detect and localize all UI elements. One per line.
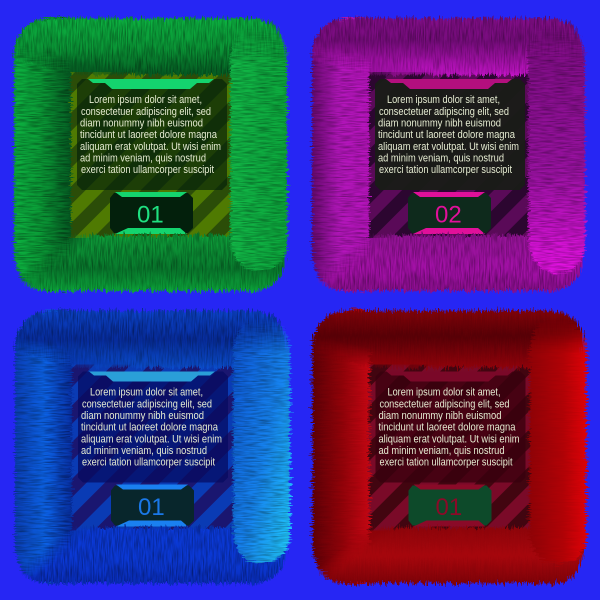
body text: exerci tation ullamcorper suscipit [81,164,214,176]
body text: ad minim veniam, quis nostrud [81,445,207,457]
text card [376,372,526,482]
body text: Lorem ipsum dolor sit amet, [89,94,202,106]
fur: left bar [312,18,369,290]
frame underlay [322,320,574,572]
body text: exerci tation ullamcorper suscipit [82,456,215,468]
fur: bottom bar [19,528,286,584]
body text: diam nonummy nibh euismod [80,118,203,130]
fur: top bar [312,310,582,368]
fur: left bar [15,310,72,582]
frame underlay [25,320,277,572]
badge accents [414,484,486,526]
fur: top bar [14,18,284,75]
text card [77,79,227,190]
body text: consectetuer adipiscing elit, sed [380,398,510,410]
body text: exerci tation ullamcorper suscipit [380,456,512,468]
body text: tincidunt ut laoreet dolore magna [80,129,218,141]
body text: diam nonummy nibh euismod [378,410,502,422]
body text [378,386,520,468]
fur: right bar [528,25,585,274]
body text [80,94,221,176]
number: 01 [138,494,165,521]
body text: diam nonummy nibh euismod [81,410,204,422]
text card [375,79,525,190]
panel: red fur frame 01 [312,310,586,584]
fur: right bar [230,25,287,271]
body text: tincidunt ut laoreet dolore magna [378,422,516,434]
body text: consectetuer adipiscing elit, sed [379,106,509,118]
body text: consectetuer adipiscing elit, sed [82,398,212,410]
striped backing [68,72,233,238]
fur: left bar [312,310,370,582]
body text [81,386,222,468]
number badge [408,486,492,526]
number: 01 [137,202,164,228]
body text: ad minim veniam, quis nostrud [378,445,504,457]
body text: aliquam erat volutpat. Ut wisi enim [378,434,520,446]
top accent [386,79,512,89]
badge accents [115,192,187,234]
body text: aliquam erat volutpat. Ut wisi enim [81,434,222,446]
frame underlay [322,28,574,280]
top accent [386,372,512,382]
fur: top bar [312,18,582,75]
body text: aliquam erat volutpat. Ut wisi enim [378,141,519,153]
number badge [408,193,491,233]
body text: tincidunt ut laoreet dolore magna [81,422,219,434]
striped backing [366,72,531,238]
fur: bottom bar [316,528,584,584]
badge accents [413,192,485,234]
fur: bottom bar [316,235,583,291]
body text: ad minim veniam, quis nostrud [80,152,206,164]
text card [78,372,228,482]
panel: blue fur frame 01 [15,310,290,584]
number: 02 [435,202,462,228]
top accent [88,79,214,89]
body text: ad minim veniam, quis nostrud [378,152,504,164]
fur: bottom bar [18,235,285,291]
striped backing [366,364,532,530]
body text: aliquam erat volutpat. Ut wisi enim [80,141,221,153]
panel: purple fur frame 02 [312,18,585,291]
fur: left bar [14,18,71,290]
top accent [89,372,215,382]
number badge [111,486,194,526]
frame underlay [24,28,276,280]
body text: consectetuer adipiscing elit, sed [81,106,211,118]
body text: Lorem ipsum dolor sit amet, [388,386,500,398]
panel: green fur frame 01 [14,18,287,291]
fur: top bar [15,310,285,368]
number: 01 [436,494,462,521]
body text: Lorem ipsum dolor sit amet, [387,94,500,106]
fur: right bar [530,318,586,564]
number badge [110,193,193,233]
badge accents [116,484,188,526]
fur: right bar [233,318,290,564]
body text: diam nonummy nibh euismod [378,118,501,130]
striped backing [69,364,234,530]
body text: exerci tation ullamcorper suscipit [379,164,512,176]
body text: Lorem ipsum dolor sit amet, [90,386,203,398]
body text [378,94,519,176]
body text: tincidunt ut laoreet dolore magna [378,129,516,141]
